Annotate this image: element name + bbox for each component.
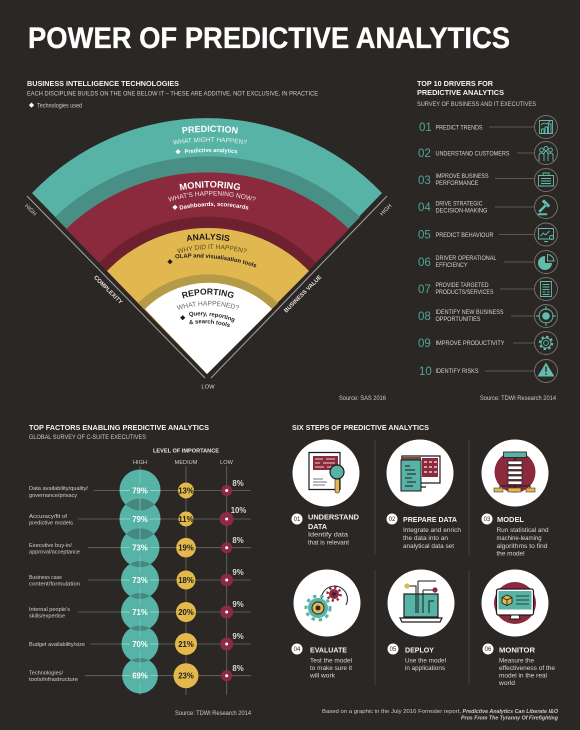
step title: EVALUATE	[310, 646, 347, 654]
low percentages: 9%	[232, 600, 244, 609]
step description: Measure the	[499, 658, 534, 664]
driver 01: PREDICT TRENDS	[436, 124, 482, 132]
band: monitoring	[66, 172, 349, 374]
high percentages: 73%	[132, 544, 148, 552]
panel: business intelligence technologies	[23, 79, 393, 402]
subheading: SURVEY OF BUSINESS AND IT EXECUTIVES	[417, 101, 536, 108]
high percentages: 69%	[132, 672, 148, 680]
driver 03: IMPROVE BUSINESS	[436, 173, 488, 180]
axis label: complexity: COMPLEXITY	[92, 275, 123, 306]
low percentages: 8%	[232, 664, 244, 673]
driver 03: PERFORMANCE	[436, 180, 478, 187]
factor labels: Executive buy-in/	[29, 543, 72, 549]
subheading: GLOBAL SURVEY OF C-SUITE EXECUTIVES	[29, 434, 146, 441]
factor labels: Budget availability/size	[29, 642, 86, 648]
legend: technologies used: Technologies used	[37, 102, 82, 110]
driver 03: 03	[418, 175, 431, 187]
factor labels	[29, 486, 88, 683]
analysis labels: WHY DID IT HAPPEN?	[177, 244, 247, 254]
step 04 evaluate	[292, 570, 360, 680]
driver 02	[418, 142, 558, 164]
step description	[308, 532, 349, 546]
step description: world	[498, 680, 515, 687]
heading line 2: PREDICTIVE ANALYTICS	[417, 88, 504, 97]
icon: model stack	[482, 440, 548, 506]
high column bubbles	[120, 470, 160, 694]
footer note: Pros From The Tyranny Of Firefighting	[461, 716, 558, 722]
icon: monitor and code document	[386, 440, 454, 506]
high percentages: 79%	[132, 486, 148, 495]
step 05 deploy	[388, 570, 454, 672]
step description: algorithms to find	[496, 543, 548, 550]
factor labels: tools/infrastructure	[29, 677, 79, 683]
heading: BUSINESS INTELLIGENCE TECHNOLOGIES	[27, 79, 179, 88]
step description: Identify data	[308, 532, 349, 538]
step description: to make sure it	[310, 665, 352, 672]
footer note: Predictive Analytics Can Liberate I&O	[462, 709, 559, 715]
medium column bubbles	[174, 482, 198, 688]
band: reporting	[145, 283, 272, 374]
icon: monitor with cube	[482, 570, 548, 636]
factor labels: content/formulation	[29, 582, 80, 588]
high percentages: 71%	[132, 608, 148, 617]
prediction labels: WHAT MIGHT HAPPEN?	[172, 137, 247, 144]
driver 09: IMPROVE PRODUCTIVITY	[436, 340, 504, 347]
step title: DEPLOY	[405, 646, 434, 654]
column headers: HIGH	[133, 460, 147, 466]
number badge: 05	[390, 647, 397, 653]
step description: Use the model	[405, 658, 446, 664]
step description: will work	[309, 672, 336, 680]
band: analysis	[107, 228, 309, 374]
driver 06: EFFICIENCY	[436, 262, 468, 269]
medium percentages: 18%	[178, 576, 194, 585]
medium percentages: 21%	[178, 640, 194, 649]
factor labels: Internal people's	[29, 607, 70, 613]
driver 10	[419, 360, 558, 382]
step description: the data into an	[403, 535, 448, 542]
heading: TOP FACTORS ENABLING PREDICTIVE ANALYTICS	[29, 423, 209, 432]
step description: the model	[496, 550, 524, 558]
monitoring labels: Dashboards, scorecards	[179, 202, 248, 210]
low percentages	[231, 479, 246, 673]
step title: MODEL	[497, 515, 524, 524]
low column bubbles	[220, 485, 234, 681]
factor labels: predictive models	[29, 520, 73, 526]
step title line 2: DATA	[308, 522, 327, 531]
reporting labels: REPORTING	[182, 288, 234, 298]
driver 02: UNDERSTAND CUSTOMERS	[436, 150, 510, 158]
low percentages: 9%	[232, 632, 244, 641]
medium percentages: 13%	[178, 486, 194, 495]
step description: Run statistical and	[496, 527, 549, 534]
driver 06: DRIVER OPERATIONAL	[436, 255, 497, 262]
high percentages: 70%	[132, 640, 148, 649]
analysis labels: ANALYSIS	[187, 234, 230, 242]
driver 04: DRIVE STRATEGIC	[436, 200, 483, 208]
factor labels: skills/expertise	[29, 614, 66, 620]
axes	[27, 196, 387, 378]
factor labels: Business case	[29, 575, 63, 581]
heading: TOP 10 DRIVERS FOR	[417, 79, 494, 88]
step description: machine-learning	[496, 535, 542, 542]
driver 07: PRODUCTS/SERVICES	[436, 289, 494, 296]
panel: six steps	[292, 423, 555, 687]
step description: Integrate and enrich	[403, 527, 461, 534]
panel: top 10 drivers	[417, 79, 558, 402]
driver 07: 07	[418, 284, 431, 296]
panel: top factors	[29, 423, 252, 717]
medium percentages: 19%	[178, 544, 194, 552]
driver 04: 04	[418, 202, 431, 214]
reporting labels: Query, reporting	[189, 312, 235, 322]
step description	[498, 658, 555, 687]
prediction labels	[172, 126, 247, 154]
step description	[496, 527, 549, 558]
driver 06: 06	[418, 257, 431, 269]
axis label: low: LOW	[201, 384, 215, 390]
reporting labels: WHAT HAPPENED?	[176, 300, 240, 310]
driver 10: IDENTIFY RISKS	[436, 368, 478, 375]
driver 05: PREDICT BEHAVIOUR	[436, 232, 494, 239]
step 01 understand data	[292, 440, 360, 546]
high percentages	[132, 486, 148, 680]
high percentages: 73%	[132, 576, 148, 585]
reporting labels	[176, 288, 240, 327]
icon: laptop	[388, 570, 454, 636]
analysis labels: OLAP and visualisation tools	[175, 254, 256, 268]
driver 05	[418, 223, 558, 246]
driver 04: DECISION-MAKING	[436, 208, 488, 214]
step description	[405, 658, 446, 672]
step 06 monitor	[482, 570, 555, 687]
low percentages: 8%	[232, 479, 244, 488]
factor labels: Technologies/	[29, 670, 63, 676]
column headers: LOW	[220, 460, 234, 466]
axis label: high left: HIGH	[23, 203, 37, 217]
driver 09	[418, 332, 558, 354]
step description: effectiveness of the	[499, 665, 555, 672]
footer note: Based on a graphic in the July 2016 Forrester report,	[322, 709, 461, 715]
source: SAS: Source: SAS 2016	[339, 395, 387, 402]
driver 02: 02	[418, 148, 431, 160]
step description: in applications	[405, 665, 445, 672]
driver 09: 09	[418, 338, 431, 350]
driver 07	[418, 278, 558, 300]
axis label: business value: BUSINESS VALUE	[283, 274, 323, 314]
band: prediction	[32, 118, 382, 374]
footer note	[322, 709, 559, 722]
driver 08	[418, 304, 558, 328]
driver 10: 10	[419, 366, 432, 378]
step description	[309, 658, 352, 680]
driver 01: 01	[419, 122, 432, 134]
number badge: 03	[484, 517, 491, 523]
high percentages: 79%	[132, 515, 148, 524]
driver 04	[418, 196, 558, 218]
axis label: high right: HIGH	[379, 203, 393, 217]
heading: SIX STEPS OF PREDICTIVE ANALYTICS	[292, 423, 429, 432]
number badge: 06	[485, 647, 492, 653]
driver 08: 08	[418, 311, 431, 323]
step description: model in the real	[499, 672, 547, 680]
step description: analytical data set	[403, 543, 454, 550]
level of importance label: LEVEL OF IMPORTANCE	[153, 448, 219, 454]
driver 08: IDENTIFY NEW BUSINESS	[436, 309, 504, 316]
icon: gears	[294, 570, 360, 636]
column headers: MEDIUM	[175, 460, 198, 466]
medium percentages	[178, 486, 194, 680]
medium percentages: 23%	[178, 672, 194, 680]
factor labels: Accuracy/fit of	[29, 514, 67, 520]
medium percentages: 11%	[178, 515, 194, 524]
low percentages: 10%	[231, 506, 246, 515]
prediction labels: PREDICTION	[182, 126, 238, 134]
factor labels: governance/privacy	[29, 493, 77, 499]
source: TDWI drivers: Source: TDWI Research 2014	[480, 395, 557, 402]
step description	[403, 527, 461, 550]
low percentages: 8%	[232, 536, 244, 545]
driver 01	[419, 116, 558, 138]
driver 03	[418, 168, 558, 192]
step title: MONITOR	[499, 646, 536, 654]
driver 05: 05	[418, 230, 431, 242]
number badge: 02	[389, 517, 396, 523]
analysis labels	[168, 234, 256, 268]
icon: document and magnifier	[292, 440, 360, 506]
monitoring labels: WHAT'S HAPPENING NOW?	[168, 191, 256, 202]
factor labels: approval/acceptance	[29, 550, 81, 556]
step description: Test the model	[310, 658, 352, 664]
driver 06	[418, 250, 558, 274]
step title: PREPARE DATA	[403, 515, 457, 524]
factor labels: Data availability/quality/	[29, 486, 88, 492]
medium percentages: 20%	[178, 608, 194, 617]
reporting labels: & search tools	[189, 319, 230, 327]
step title: UNDERSTAND	[308, 512, 359, 522]
prediction labels: Predictive analytics	[184, 148, 238, 154]
fan chart	[23, 118, 393, 390]
driver 07: PROVIDE TARGETED	[436, 282, 489, 289]
monitoring labels	[168, 181, 256, 210]
driver 08: OPPORTUNITIES	[436, 316, 480, 323]
number badge: 01	[294, 517, 301, 523]
low percentages: 9%	[232, 568, 244, 577]
subheading: EACH DISCIPLINE BUILDS ON THE ONE BELOW IT – THESE ARE ADDITIVE, NOT EXCLUSIVE, IN PRACTICE	[27, 90, 318, 98]
step 03 model	[482, 440, 549, 558]
title: POWER OF PREDICTIVE ANALYTICS	[28, 22, 510, 55]
step description: that is relevant	[308, 540, 349, 546]
number badge: 04	[294, 647, 301, 653]
bubble chart	[78, 466, 251, 695]
step 02 prepare data	[386, 440, 461, 550]
grid lines	[78, 466, 251, 695]
monitoring labels: MONITORING	[180, 181, 240, 190]
source: TDWI factors: Source: TDWI Research 2014	[175, 710, 252, 717]
column headers	[133, 460, 234, 466]
